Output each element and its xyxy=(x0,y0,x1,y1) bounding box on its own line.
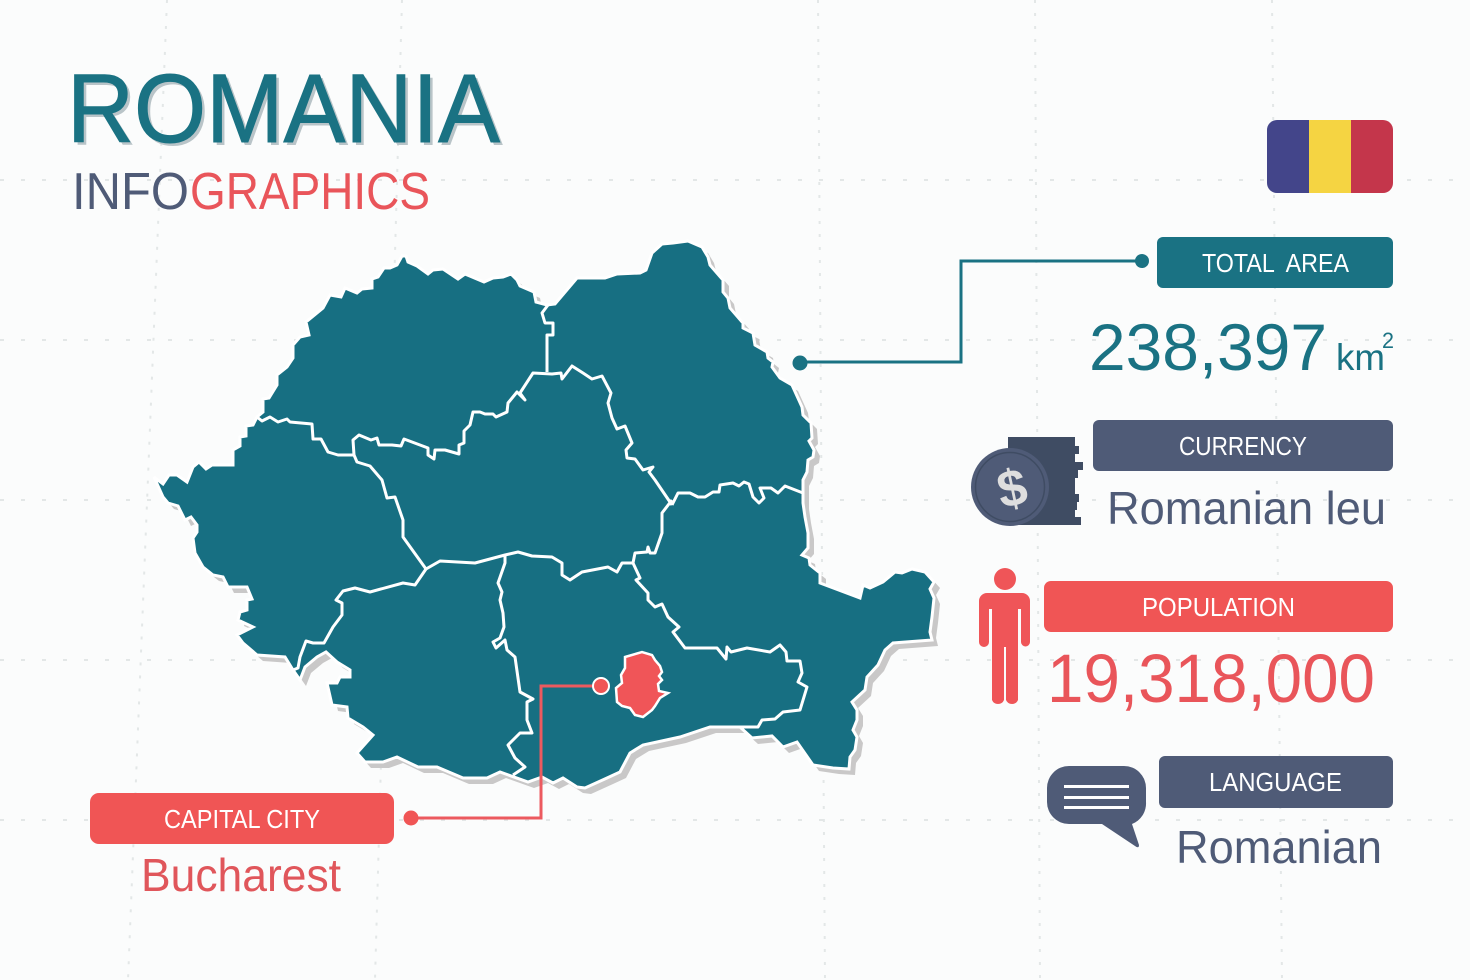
map of Romania xyxy=(154,241,940,794)
flag of Romania xyxy=(1267,120,1393,193)
language label xyxy=(1159,756,1393,808)
total area connector xyxy=(792,254,1149,370)
capital city label: CAPITAL CITY xyxy=(164,804,320,834)
title: ROMANIA xyxy=(70,57,503,166)
currency label: CURRENCY xyxy=(1179,431,1307,461)
subtitle: GRAPHICS xyxy=(190,163,430,221)
icon: coins: $ xyxy=(992,458,1032,520)
map shadow xyxy=(160,247,940,794)
population value: 19,318,000 xyxy=(1047,640,1375,717)
total area label xyxy=(1157,237,1393,288)
currency value: Romanian leu xyxy=(1107,482,1386,534)
capital city connector xyxy=(404,678,609,826)
Bucharest region xyxy=(616,652,668,717)
total area value: km xyxy=(1336,337,1385,378)
language value: Romanian xyxy=(1176,821,1382,873)
population label xyxy=(1044,581,1393,632)
capital city label xyxy=(90,793,394,844)
currency label xyxy=(1093,420,1393,471)
population label: POPULATION xyxy=(1142,592,1295,622)
total area value: 238,397 xyxy=(1089,310,1327,384)
icon: coins xyxy=(971,437,1083,526)
subtitle xyxy=(72,163,430,221)
capital city value: Bucharest xyxy=(141,849,341,901)
icon: person xyxy=(979,568,1030,704)
title: ROMANIA xyxy=(67,54,500,163)
map regions xyxy=(154,241,934,788)
subtitle: INFO xyxy=(72,163,189,221)
total area label: TOTAL AREA xyxy=(1202,248,1350,278)
icon: speech bubble xyxy=(1047,766,1146,847)
region borders xyxy=(257,305,807,775)
language label: LANGUAGE xyxy=(1209,767,1342,797)
total area value: 2 xyxy=(1382,328,1394,353)
